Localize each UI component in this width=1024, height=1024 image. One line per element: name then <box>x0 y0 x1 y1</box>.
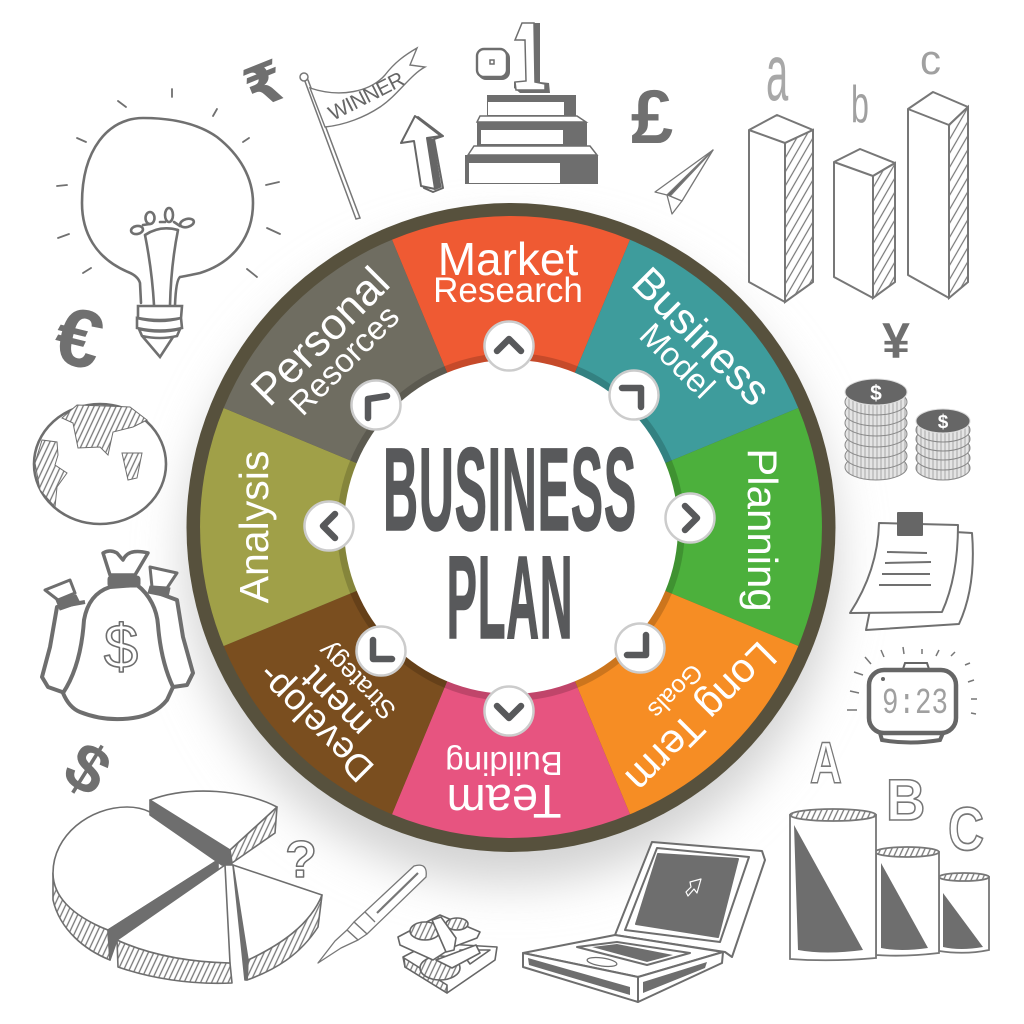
button: right <box>666 494 714 542</box>
icon: paper plane <box>655 150 713 214</box>
title: business plan <box>383 424 637 663</box>
icon: pie chart: ? <box>285 831 317 889</box>
icon: cylinder chart abc <box>790 730 989 960</box>
segment: planning <box>511 408 822 646</box>
icon: coin stacks: $ <box>870 382 882 405</box>
icon: alarm clock <box>847 647 977 742</box>
label: analysis: Analysis <box>231 451 277 603</box>
title: business plan: PLAN <box>447 531 573 663</box>
label: team building: Team <box>447 775 561 828</box>
icon: bar chart abc: a <box>766 29 789 118</box>
icon: euro: € <box>46 289 112 388</box>
label: development strategy: Develop- <box>248 656 382 790</box>
icon: pie chart <box>53 791 322 983</box>
segment: personal resources <box>224 240 511 527</box>
segment: business model <box>511 240 798 527</box>
icon: money bundles <box>398 915 497 993</box>
icon: globe <box>34 404 166 524</box>
inner darker band <box>337 353 685 701</box>
icon: cylinder chart abc: B <box>886 767 925 832</box>
label: market research <box>433 233 583 310</box>
flag label: WINNER <box>325 68 408 125</box>
label: development strategy: Strategy <box>312 636 402 726</box>
icon: money bags <box>42 551 193 719</box>
icon: notes <box>850 513 973 630</box>
button: down <box>484 686 534 736</box>
icon: cylinder chart abc: C <box>948 794 984 863</box>
label: planning: Planning <box>739 448 786 612</box>
label: market research: Research <box>433 271 583 310</box>
icon: pen <box>318 865 426 963</box>
icon: light bulb <box>57 89 280 357</box>
button: down left <box>356 626 406 676</box>
segment: long term goals <box>511 527 798 814</box>
label: team building: Building <box>445 745 563 782</box>
label: personal resorces: Resorces <box>281 297 406 422</box>
icon: bar chart abc <box>749 29 968 302</box>
icon: bar chart abc: c <box>920 36 941 83</box>
icon: up arrow <box>401 116 443 192</box>
icon: alarm clock: 9:23 <box>882 683 948 724</box>
label: long term goals: Goals <box>642 658 708 724</box>
label: long term goals: Long Term <box>617 633 786 802</box>
label: business model: Business <box>623 258 780 415</box>
segment: analysis <box>200 408 511 646</box>
icon: coin stacks: $ <box>938 412 949 433</box>
label: market research: Market <box>438 233 579 285</box>
label: team building <box>445 745 563 828</box>
button: up left <box>352 380 400 430</box>
wheel shadow <box>186 233 836 883</box>
button: left <box>304 502 354 550</box>
label: business model: Model <box>633 316 722 405</box>
label: development strategy <box>248 618 420 790</box>
icon: rupee: ₹ <box>235 48 295 121</box>
label: personal resorces: Personal <box>242 258 399 415</box>
label: development strategy: ment <box>292 658 380 746</box>
button: down right <box>616 624 664 672</box>
icon: laptop <box>523 842 765 1002</box>
wheel <box>186 203 836 852</box>
icon: pound: £ <box>631 75 673 160</box>
button: up <box>484 322 534 370</box>
button: up right <box>610 370 658 420</box>
segment: market research <box>392 216 630 527</box>
icon: dollar: $ <box>51 727 124 811</box>
hub <box>344 360 678 694</box>
segment: development strategy <box>224 527 511 814</box>
icon: yen: ¥ <box>882 313 910 369</box>
icon: number one podium <box>465 23 598 184</box>
title: business plan: BUSINESS <box>383 424 637 556</box>
icon: money bags: $ <box>104 613 138 682</box>
segment: team building <box>392 527 630 838</box>
icon: cylinder chart abc: A <box>810 730 842 795</box>
icon: winner flag <box>300 48 425 219</box>
icon: coin stacks <box>845 379 970 480</box>
icon: bar chart abc: b <box>851 76 869 134</box>
